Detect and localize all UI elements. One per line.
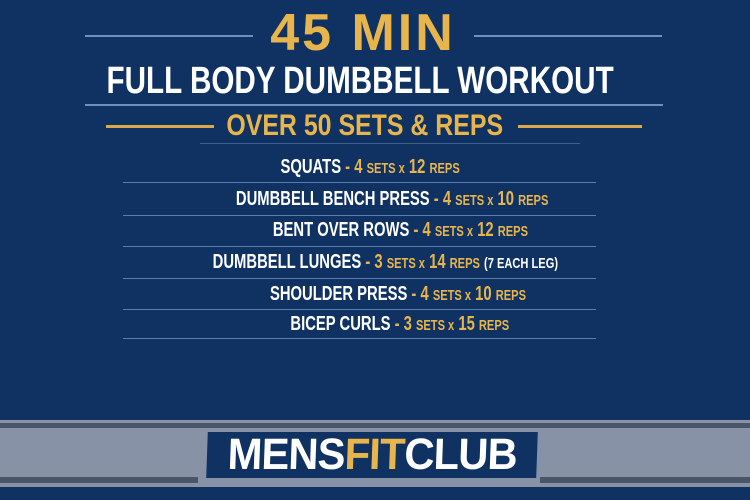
footer band: [0, 420, 750, 487]
exercise list: [123, 156, 596, 339]
row: lunges: DUMBBELL LUNGES - 3 SETS x 14 REPS (7 EACH LEG): [212, 251, 558, 273]
row: bicep curls: BICEP CURLS - 3 SETS x 15 REPS: [291, 313, 509, 335]
row: shoulder press: SHOULDER PRESS - 4 SETS x 10 REPS: [270, 283, 526, 305]
subtitle: FULL BODY DUMBBELL WORKOUT: [106, 60, 614, 102]
row: bent over rows: BENT OVER ROWS - 4 SETS x 12 REPS: [272, 219, 528, 241]
row: bench press: DUMBBELL BENCH PRESS - 4 SETS x 10 REPS: [236, 188, 548, 210]
row: squats: SQUATS - 4 SETS x 12 REPS: [280, 156, 460, 178]
logo: MENSFITCLUB: MENSFITCLUB: [227, 430, 517, 479]
title: 45 MIN: 45 MIN: [270, 4, 456, 62]
heading: over 50 sets: OVER 50 SETS & REPS: [227, 109, 503, 142]
